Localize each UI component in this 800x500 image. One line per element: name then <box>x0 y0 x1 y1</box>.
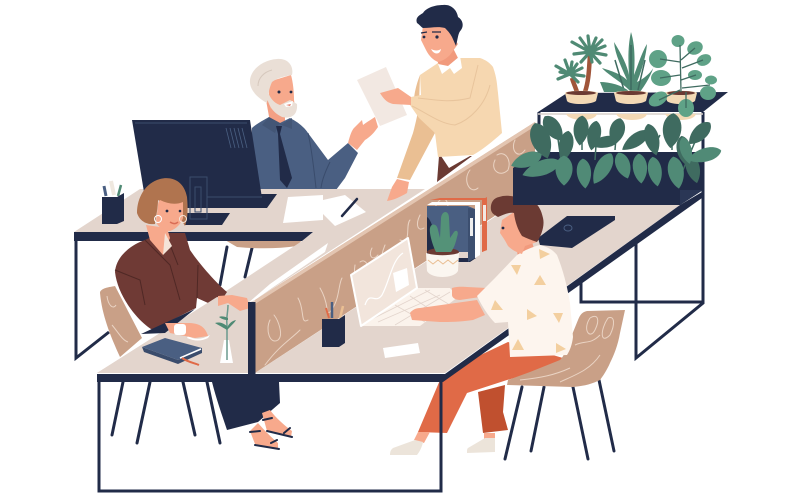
woman neck <box>146 225 170 255</box>
woman chair back <box>100 286 142 357</box>
older man face <box>268 75 296 117</box>
person: older man in blue shirt <box>250 59 378 190</box>
hanging plants, dark leaves <box>526 112 715 185</box>
right desk surface <box>255 205 680 373</box>
papers and pen on back desk <box>283 195 366 226</box>
hanging plant stems <box>556 125 700 170</box>
near arm <box>410 300 485 322</box>
collar <box>438 56 462 74</box>
woman forearms, watch and mouse <box>165 295 250 340</box>
standing man reaching hand <box>380 88 411 105</box>
front desk left surface foreground <box>97 297 248 373</box>
printed shirt <box>477 245 573 357</box>
person: seated woman <box>100 286 292 449</box>
dark gap under woman arm <box>141 309 195 334</box>
front trouser leg <box>418 342 563 433</box>
pot undersides <box>566 114 696 120</box>
rear trouser leg <box>478 385 508 433</box>
hair <box>491 196 544 242</box>
phone on desk <box>383 343 420 358</box>
white binder <box>427 202 480 258</box>
notebook <box>142 338 202 365</box>
blue binder <box>427 206 475 258</box>
neck <box>436 46 458 70</box>
person: seated man upper body <box>410 196 573 357</box>
woman earrings <box>154 216 162 222</box>
person: standing man, lower body <box>437 156 472 182</box>
woman jacket <box>115 233 227 333</box>
hanging plants, light leaves <box>509 136 723 190</box>
wood grain <box>265 140 525 365</box>
back chair <box>220 240 302 285</box>
face <box>500 212 537 254</box>
older man hair <box>250 59 292 103</box>
older man hand <box>348 117 378 150</box>
neck <box>515 235 535 258</box>
monitor base <box>185 194 277 225</box>
desk legs and frame <box>76 112 703 491</box>
woman chair legs <box>112 382 220 443</box>
sweater torso <box>410 58 502 157</box>
loose paper held between men <box>357 67 407 126</box>
far arm <box>452 287 487 300</box>
laptop <box>351 238 458 326</box>
face <box>421 26 458 62</box>
dark partition post <box>248 302 256 374</box>
tablet <box>538 216 615 248</box>
lower hand <box>387 179 409 201</box>
glass vase with sprig <box>215 305 236 363</box>
older man tie <box>276 126 292 188</box>
person: seated man lower body <box>390 342 563 455</box>
potted cactus <box>426 212 459 277</box>
woman feet and sandals <box>262 410 292 437</box>
desk surface: back and left wing <box>74 189 425 373</box>
front desk edge <box>97 192 702 382</box>
older man shirt <box>252 117 358 190</box>
older man neck <box>266 100 285 125</box>
mouth <box>431 49 441 54</box>
right chair <box>505 310 625 459</box>
shirt triangles <box>491 249 566 353</box>
front vertical leg over trousers <box>440 382 442 491</box>
plant pot 1 with palms <box>556 36 606 104</box>
older man beard <box>266 92 297 118</box>
plant pot 2 with aloe <box>600 32 655 104</box>
white privacy strip <box>248 243 328 303</box>
orange binder <box>430 198 487 252</box>
planter box <box>513 152 703 205</box>
binders <box>427 197 487 262</box>
woman trousers <box>212 382 280 430</box>
hair <box>417 5 463 46</box>
pen cup on back desk <box>102 181 124 224</box>
woman upper body <box>115 178 227 333</box>
pen cup on front desk <box>322 302 345 347</box>
woman hair back <box>137 178 188 226</box>
back arm <box>397 75 435 180</box>
back desk front edge <box>74 232 313 241</box>
person: standing man, upper body <box>387 5 502 201</box>
standing man trousers <box>437 156 472 182</box>
plant pot 3 with pilea <box>646 35 717 117</box>
shoes <box>390 440 423 455</box>
monitor <box>132 120 277 225</box>
partition <box>255 122 537 373</box>
ankles <box>414 432 495 443</box>
woman face <box>156 200 183 231</box>
shelf <box>538 92 728 120</box>
